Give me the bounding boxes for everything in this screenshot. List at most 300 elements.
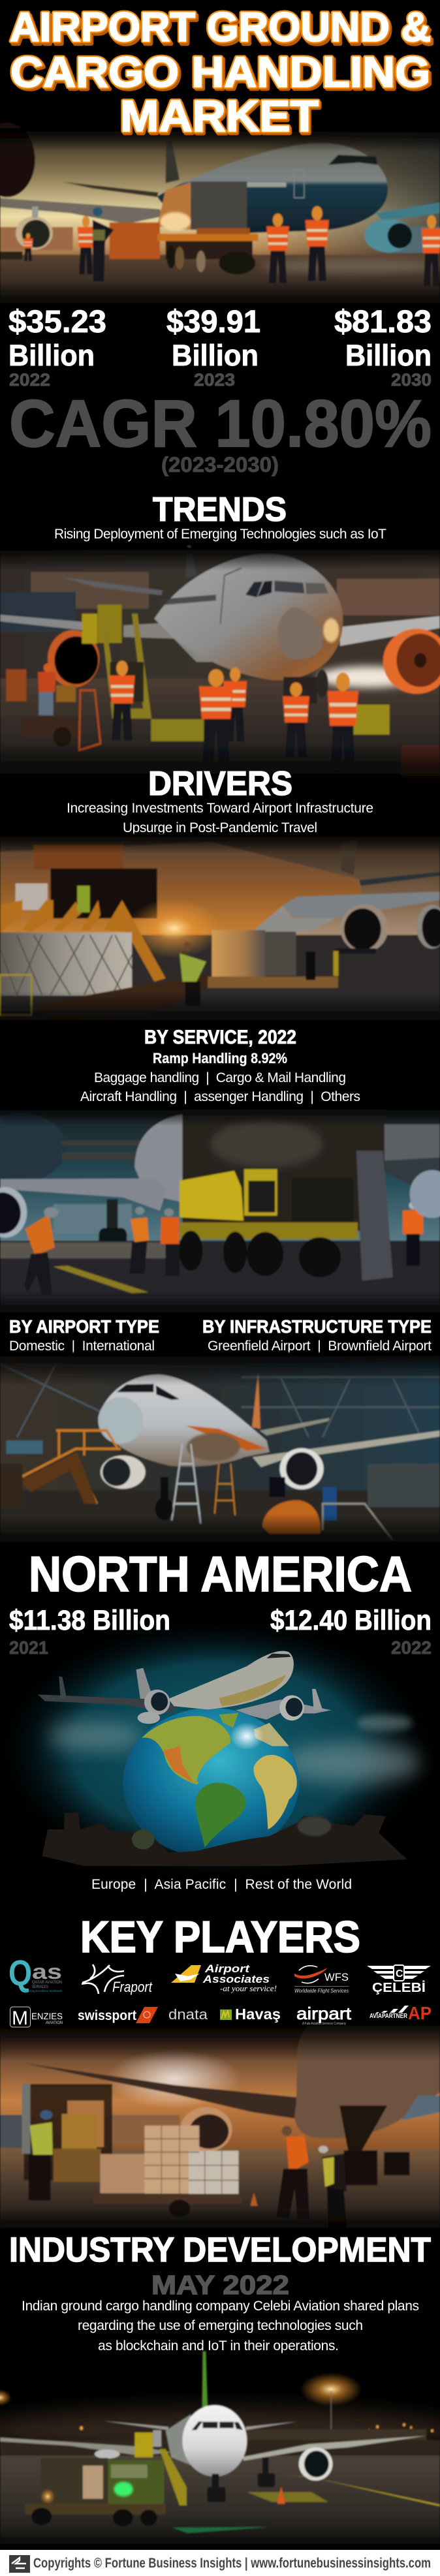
apron [0, 2149, 440, 2235]
stat: north america 2022 [270, 1605, 432, 1658]
right engine [364, 219, 413, 253]
traffic cone [250, 2192, 258, 2206]
upper struts [62, 1141, 140, 1160]
far right crate [401, 745, 440, 779]
stat: 2030 market size: 2030 [391, 370, 432, 390]
nose gear [155, 1477, 173, 1520]
worker in orange jacket [77, 216, 95, 274]
europe sliver [254, 1723, 289, 1746]
development text line one: Indian ground cargo handling company Celebi Aviation shared plans [22, 2299, 419, 2314]
logo: Celebi [367, 1965, 431, 1995]
city highlights [298, 1816, 331, 1836]
box grid lines [144, 2126, 238, 2194]
development date: MAY 2022 [151, 2270, 289, 2300]
right wing [242, 2436, 426, 2460]
logo: Aviapartner: AP [408, 2003, 432, 2023]
left glow [0, 2389, 11, 2406]
title: MARKET [120, 91, 319, 141]
title: CARGO HANDLING [12, 50, 432, 98]
apron reflection [261, 259, 440, 273]
rear fuselage [166, 2414, 196, 2467]
dark machinery wall [182, 1108, 385, 1231]
wing tip [59, 1676, 67, 1699]
logo: Celebi: ÇELEBİ [372, 1980, 426, 1995]
wing [24, 2063, 298, 2119]
stat: 2023 market size: Billion [172, 339, 259, 372]
photo: cargo aircraft loading at sunset [0, 123, 440, 309]
worker on deck [306, 952, 315, 980]
worker foreground [199, 669, 233, 762]
main gear [270, 1477, 285, 1497]
engine left [144, 1690, 170, 1715]
heading: by service: BY SERVICE, 2022 [144, 1027, 296, 1048]
title [10, 5, 433, 143]
forklift body [54, 2149, 101, 2182]
landing gear [336, 948, 376, 954]
blue wall left [0, 592, 76, 632]
illustration: airliner flying over globe [0, 1617, 438, 1883]
tail [341, 839, 358, 875]
heading: trends: TRENDS [153, 491, 287, 529]
logo: Swissport: swissport [78, 2008, 136, 2023]
door outline [220, 568, 242, 624]
stat: north america 2021 [9, 1605, 170, 1658]
yellow pallet [151, 719, 204, 741]
orange cowling [262, 1500, 321, 1534]
logo: Airpart: airpart [296, 2004, 352, 2023]
cockpit windows [192, 2421, 243, 2430]
hangar trusses [0, 1364, 440, 1437]
apron [0, 2456, 440, 2551]
stat: 2022 market size [8, 305, 106, 390]
logo: Airport Associates [171, 1963, 277, 1993]
green stand glow [172, 2527, 270, 2533]
title: AIRPORT GROUND & [10, 5, 431, 50]
right engine [383, 628, 440, 694]
right engine [299, 2447, 332, 2481]
logo: Menzies [10, 2007, 63, 2029]
africa [253, 1755, 297, 1829]
left wing [0, 615, 84, 630]
logo: WFS [294, 1966, 349, 1994]
tail fin [185, 546, 196, 579]
truck wheels [179, 1231, 341, 1277]
clouds left [48, 1723, 143, 1750]
stat: north america 2022: 2022 [391, 1637, 432, 1658]
ramp handling share: Ramp Handling 8.92% [153, 1050, 287, 1066]
logo: Aviapartner: AVIAPARTNER [369, 2013, 408, 2020]
boxes left [100, 2154, 145, 2193]
logo: Aviapartner [369, 2003, 432, 2023]
distant hangar left [0, 2115, 28, 2148]
worker at engine [24, 233, 33, 261]
rear stabilizer [136, 1668, 153, 1699]
landing gear bay [339, 2105, 387, 2150]
vehicle rear green [108, 2460, 164, 2513]
wing belly [253, 905, 337, 932]
belly reflection [219, 1675, 286, 1706]
right equipment [368, 1464, 440, 1507]
front fuselage [182, 2405, 247, 2477]
cockpit [266, 1654, 291, 1658]
development text line two: regarding the use of emerging technologies such [78, 2318, 363, 2333]
big engine nacelle at top [0, 1113, 66, 1183]
left engine top [95, 2449, 120, 2459]
right wing [236, 1699, 331, 1720]
terminal silhouettes [247, 2429, 426, 2441]
large wrapped container [0, 933, 132, 996]
title: AIRPORT GROUND & [10, 5, 431, 50]
container netting [0, 935, 132, 995]
glowing net highlight [160, 212, 191, 231]
painted stand markings [247, 2492, 328, 2502]
floodlight mast [330, 2391, 332, 2438]
hangar windows right [337, 579, 440, 615]
logo: Airport Associates: Associates [202, 1973, 270, 1985]
development text line three: as blockchain and IoT in their operations. [98, 2338, 339, 2353]
stat: 2022 market size: 2022 [9, 370, 50, 390]
wing [283, 892, 440, 918]
hangar floor [0, 1491, 440, 1547]
logo: Havas: Havaş [235, 2006, 281, 2023]
winglet right [312, 1689, 322, 1710]
fuselage behind wing [134, 1114, 191, 1204]
engine shadow [138, 1712, 160, 1724]
front loader [34, 975, 208, 1020]
yellow rail left [0, 975, 31, 1015]
terminal building left [54, 1204, 132, 1234]
cockpit windows [328, 155, 377, 165]
logo: WFS: Worldwide Flight Services [294, 1988, 349, 1994]
logo: Celebi: C [396, 1968, 403, 1979]
truck rear [292, 1177, 354, 1222]
title: CARGO HANDLING [10, 48, 430, 96]
cone [277, 2487, 285, 2504]
vehicle wheels [31, 2507, 157, 2526]
stat: north america 2021: $11.38 Billion [9, 1605, 170, 1636]
worker on stairs [109, 660, 135, 740]
south america [196, 1782, 245, 1848]
tail fin [166, 138, 180, 183]
open container [265, 932, 296, 976]
worker hi-vis [180, 942, 206, 1006]
logo: Airport Associates: Airport [204, 1963, 251, 1975]
worker orange vest [276, 2126, 309, 2218]
worker middle [130, 1207, 149, 1274]
left wall banner [6, 1440, 42, 1454]
upper stabilizer [260, 1418, 330, 1435]
service list line two: Aircraft Handling | assenger Handling | Others [80, 1089, 360, 1104]
floor glare [317, 666, 418, 688]
left wing [0, 198, 163, 224]
logo: dnata: dnata [168, 2006, 208, 2023]
nose glare [323, 618, 339, 642]
right engine [280, 1448, 324, 1489]
pallet trolley [93, 2194, 242, 2217]
cargo container [191, 181, 247, 230]
yellow rail right [334, 951, 338, 976]
floor [0, 679, 440, 779]
worker in hi-vis left [266, 213, 289, 283]
worker by truck [161, 1209, 180, 1276]
logo: QAS: as [32, 1960, 62, 1983]
stat: 2023 market size: $39.91 [166, 305, 260, 339]
truck chassis [180, 1222, 358, 1239]
logo: QAS: Delivering Excellence Worldwide [23, 1989, 62, 1993]
clouds far right [356, 1715, 413, 1731]
workers in cargo bay [77, 886, 90, 912]
taxi line [54, 1265, 149, 1294]
service list line one: Baggage handling | Cargo & Mail Handling [94, 1070, 346, 1085]
apron [0, 1241, 440, 1317]
headlight [40, 2489, 55, 2504]
taxi line [281, 2475, 440, 2506]
right building [382, 1124, 440, 1161]
worker left [25, 1207, 58, 1295]
cabin door [294, 170, 304, 198]
orange stairs [21, 1431, 121, 1504]
left engine [101, 1455, 146, 1489]
fuselage [294, 2023, 440, 2139]
stat: 2023 market size: 2023 [194, 370, 235, 390]
airport lights [80, 2423, 433, 2432]
cabin window strip [247, 183, 286, 187]
cargo bay door frame [34, 845, 123, 869]
city bushes [132, 1829, 154, 1850]
rear window [111, 2464, 148, 2478]
worker left in blue jeans [38, 663, 56, 715]
wing root shade [401, 2096, 440, 2120]
greenland [219, 1713, 238, 1728]
boxes right white [189, 2150, 238, 2194]
fuselage [168, 1651, 294, 1709]
engine right [279, 1695, 304, 1720]
yellow stairs [82, 605, 151, 719]
left engine [0, 1187, 27, 1237]
wing [0, 1179, 167, 1211]
orange stripe [185, 1425, 266, 1450]
green light [114, 2482, 133, 2496]
worker hi-vis forklift [29, 2110, 53, 2201]
apron [0, 255, 440, 308]
teal backdrop [0, 1617, 438, 1883]
stat: 2030 market size: $81.83 [334, 305, 432, 339]
title: MARKET [120, 91, 319, 141]
CAGR period: (2023-2030) [161, 453, 279, 476]
cabin windows [159, 595, 216, 606]
heading: by airport type: BY AIRPORT TYPE [9, 1316, 159, 1337]
logo: Airpart: A Fala Aviation Services Company [302, 2022, 346, 2026]
apron [0, 935, 440, 1025]
stat: 2022 market size: Billion [8, 339, 95, 372]
worker in hi-vis right [306, 206, 329, 281]
cargo bay interior [50, 869, 157, 918]
left wing [38, 1694, 180, 1713]
logo: QAS: QATAR AVIATION [32, 1981, 62, 1985]
footer logo [9, 2555, 30, 2573]
supervisor in dark jacket [93, 207, 114, 281]
left equipment [0, 1464, 22, 1507]
central workers [223, 668, 247, 741]
CAGR figure: CAGR 10.80% [9, 386, 432, 461]
footer bar [0, 2550, 440, 2576]
horizon buildings [0, 227, 73, 251]
stabilizer [62, 577, 163, 595]
far apron band [0, 1243, 180, 1258]
cockpit windows [116, 1384, 180, 1400]
boxes centre [144, 2126, 199, 2194]
landing gear [99, 1199, 127, 1253]
city silhouette [42, 1813, 407, 1866]
heading: key players: KEY PLAYERS [80, 1912, 360, 1962]
heading: drivers: DRIVERS [148, 765, 292, 803]
cart at left [22, 685, 78, 747]
blue ladder [172, 1444, 200, 1524]
yellow truck tank [180, 1171, 244, 1220]
left engine [48, 630, 99, 687]
nose cone [277, 607, 323, 659]
dark foreground wing tip [0, 123, 35, 197]
driver two: Upsurge in Post-Pandemic Travel [123, 820, 317, 835]
worker under nose [283, 682, 309, 757]
clouds right [281, 1743, 421, 1783]
title: AIRPORT GROUND & [12, 7, 433, 53]
belly reflection [187, 1433, 240, 1461]
fuselage [98, 1374, 270, 1466]
glowing container [212, 930, 265, 976]
logo: QAS [8, 1952, 62, 1993]
right wing [376, 202, 440, 220]
logo: Menzies: M [12, 2008, 28, 2029]
left orange equipment [6, 670, 26, 701]
nose [98, 1397, 143, 1444]
title: MARKET [121, 93, 320, 143]
distant hangar center [110, 2115, 180, 2145]
stat: 2030 market size: Billion [345, 339, 432, 372]
hoses column [356, 1151, 393, 1280]
right wing structure [382, 1157, 440, 1187]
main engine [340, 905, 388, 952]
forklift windows [67, 2101, 104, 2147]
yellow cab [244, 1169, 277, 1216]
stairs body [20, 1452, 97, 1504]
floodlight glow [300, 2373, 362, 2406]
gear legs [344, 2150, 410, 2185]
infrastructure type list: Greenfield Airport | Brownfield Airport [208, 1339, 432, 1354]
photo: technicians around silver airliner in hangar [0, 546, 440, 784]
wing root and left nacelle [123, 622, 222, 662]
logo: QAS: SERVICES [32, 1985, 48, 1989]
logo: Fraport [82, 1964, 153, 1995]
left engine [16, 206, 53, 250]
worker right [328, 672, 358, 772]
logo: Fraport: Fraport [112, 1979, 153, 1995]
aircraft fuselage [157, 143, 388, 233]
left ground cart [0, 251, 22, 259]
sun glow [106, 2049, 242, 2109]
photo: yellow ground support truck on apron [0, 1106, 440, 1317]
tail fin [252, 1373, 260, 1429]
photo: airliner under maintenance in hangar [0, 1352, 440, 1547]
vehicle cab [40, 2458, 108, 2506]
worker dark jacket [319, 2146, 347, 2227]
heading: north america: NORTH AMERICA [29, 1547, 412, 1602]
airport type list: Domestic | International [9, 1339, 155, 1354]
forklift mast [22, 2084, 30, 2154]
fuselage [154, 553, 343, 680]
machinery texture [210, 1121, 322, 1168]
landing gear [283, 670, 328, 704]
photo: airliner at night on apron [0, 2351, 440, 2551]
photo: cargo loading at freighter door [0, 833, 440, 1025]
vehicle base [25, 2504, 166, 2515]
forklift frame [24, 2084, 112, 2180]
globe highlight [230, 1722, 264, 1750]
horizon band [0, 2440, 440, 2457]
north america continent [142, 1716, 230, 1784]
small orange ladder [215, 1464, 235, 1515]
seated operators [62, 2114, 97, 2149]
cockpit windows [245, 581, 328, 597]
stat: 2022 market size: $35.23 [8, 305, 106, 339]
net-wrapped cargo [157, 183, 191, 230]
cart [322, 1504, 393, 1540]
engine [180, 2107, 232, 2152]
stabilizer [62, 182, 159, 197]
mexico region [163, 1746, 194, 1783]
blue gas cylinder [322, 1487, 337, 1521]
photo: sunset cargo pallet and forklift [0, 2023, 440, 2235]
left wing [0, 2438, 171, 2456]
second engine [416, 905, 440, 949]
logo: QAS: Q [8, 1952, 32, 1993]
upper stabilizers [102, 2421, 298, 2430]
driver one: Increasing Investments Toward Airport Infrastructure [67, 801, 373, 816]
logo: Menzies: ENZIES [31, 2011, 63, 2021]
trends text: Rising Deployment of Emerging Technologies such as IoT [54, 527, 386, 542]
logo: Airport Associates: -at your service! [220, 1983, 277, 1993]
distant horizon haze [0, 2408, 440, 2454]
hangar windows left [31, 572, 149, 609]
wall panel [16, 884, 48, 910]
cargo loader [110, 223, 258, 274]
upper strut [359, 872, 440, 886]
landing gear nose [207, 2474, 226, 2502]
other regions list: Europe | Asia Pacific | Rest of the World [91, 1877, 352, 1892]
tail fin [202, 2351, 208, 2407]
landing gear main [258, 2457, 275, 2487]
stat: 2030 market size [334, 305, 432, 390]
logo: WFS: WFS [324, 1971, 349, 1983]
yellow stairs [134, 2430, 187, 2506]
right aircraft nose [410, 1170, 440, 1218]
belly light glow [126, 899, 222, 958]
orange conveyors [0, 900, 166, 982]
stat: 2023 market size [166, 305, 260, 390]
fuselage [0, 842, 362, 935]
stat: north america 2021: 2021 [9, 1637, 48, 1658]
right wing [339, 616, 440, 646]
right wing [253, 1431, 440, 1467]
yellow box right [354, 705, 390, 735]
globe [123, 1708, 299, 1857]
title: CARGO HANDLING [10, 48, 430, 96]
cab window [83, 2466, 103, 2499]
distant worker [403, 1202, 423, 1265]
orange ladder [79, 691, 101, 750]
logo: Menzies: AVIATION [46, 2021, 63, 2025]
worker at right edge [422, 215, 440, 286]
